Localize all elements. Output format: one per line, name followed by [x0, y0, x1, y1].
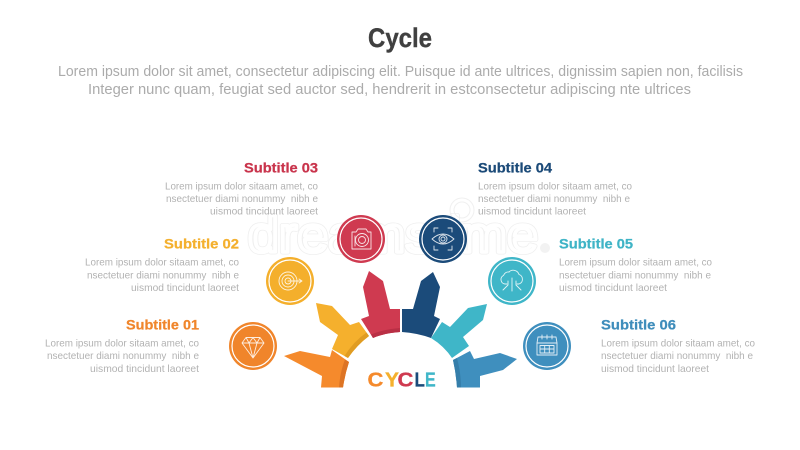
text block: subtitle 04 — [478, 160, 632, 218]
text block: subtitle 05: Lorem ipsum dolor sitaam amet, co — [559, 256, 712, 268]
center label: CYCLE: L — [414, 368, 425, 391]
watermark: dreamstime — [248, 207, 538, 263]
text block: subtitle 06 — [601, 316, 755, 375]
text block: subtitle 05 — [559, 236, 712, 294]
text block: subtitle 02: nsectetuer diami nonummy nibh e — [87, 270, 239, 282]
text block: subtitle 03: uismod tincidunt laoreet — [210, 206, 318, 218]
text block: subtitle 01: uismod tincidunt laoreet — [90, 363, 199, 375]
text block: subtitle 04: Lorem ipsum dolor sitaam amet, co — [478, 180, 632, 192]
text block: subtitle 06: nsectetuer diami nonummy nibh e — [601, 350, 753, 362]
text block: subtitle 06: uismod tincidunt laoreet — [601, 363, 709, 375]
text block: subtitle 03: nsectetuer diami nonummy nibh e — [166, 193, 318, 205]
watermark: dreamstime — [248, 207, 538, 263]
center label: CYCLE: Y — [385, 369, 399, 391]
center label: CYCLE: C — [368, 369, 383, 391]
text block: subtitle 05: Subtitle 05 — [559, 236, 633, 252]
intro text — [58, 64, 743, 98]
arrow: red — [361, 271, 400, 338]
text block: subtitle 02: uismod tincidunt laoreet — [131, 282, 239, 294]
icon circle: calendar — [523, 322, 571, 370]
center label: CYCLE: E — [425, 369, 436, 391]
text block: subtitle 03: Lorem ipsum dolor sitaam amet, co — [165, 180, 318, 192]
icon circle: target — [266, 257, 314, 305]
arrow: teal — [431, 304, 487, 358]
text block: subtitle 01: nsectetuer diami nonummy nibh e — [47, 350, 199, 362]
center label: CYCLE: C — [398, 369, 413, 391]
icon circle: cloud — [488, 257, 536, 305]
text block: subtitle 04: uismod tincidunt laoreet — [478, 206, 586, 218]
intro text: Lorem ipsum dolor sit amet, consectetur adipiscing elit. Puisque id ante ultrices, dignissim sapien non, facilisis — [58, 64, 743, 80]
arrow: blue — [453, 351, 517, 388]
icon circle: camera — [337, 215, 385, 263]
text block: subtitle 06: Lorem ipsum dolor sitaam amet, co — [601, 338, 755, 350]
text block: subtitle 05: uismod tincidunt laoreet — [559, 282, 667, 294]
intro text: Integer nunc quam, feugiat sed auctor sed, hendrerit in estconsectetur adipiscing nte ultrices — [88, 82, 691, 98]
text block: subtitle 04: Subtitle 04 — [478, 160, 552, 176]
center label: CYCLE — [368, 368, 436, 391]
icon circle: eye — [419, 215, 467, 263]
arrow segments — [284, 271, 517, 388]
text block: subtitle 02: Lorem ipsum dolor sitaam amet, co — [85, 256, 239, 268]
text block: subtitle 03 — [165, 160, 318, 218]
arrow: yellow — [316, 303, 369, 358]
icon circle: diamond — [229, 322, 277, 370]
arrow: orange — [284, 350, 349, 388]
text block: subtitle 02 — [85, 236, 239, 294]
text block: subtitle 04: nsectetuer diami nonummy nibh e — [478, 193, 630, 205]
text block: subtitle 06: Subtitle 06 — [601, 316, 676, 332]
text block: subtitle 02: Subtitle 02 — [164, 236, 239, 252]
text block: subtitle 05: nsectetuer diami nonummy nibh e — [559, 270, 711, 282]
text block: subtitle 01: Lorem ipsum dolor sitaam amet, co — [45, 338, 199, 350]
text block: subtitle 03: Subtitle 03 — [244, 160, 318, 176]
title: Cycle — [368, 23, 432, 53]
arrow: navy — [402, 272, 440, 338]
text block: subtitle 01: Subtitle 01 — [126, 316, 199, 332]
text block: subtitle 01 — [45, 316, 199, 375]
